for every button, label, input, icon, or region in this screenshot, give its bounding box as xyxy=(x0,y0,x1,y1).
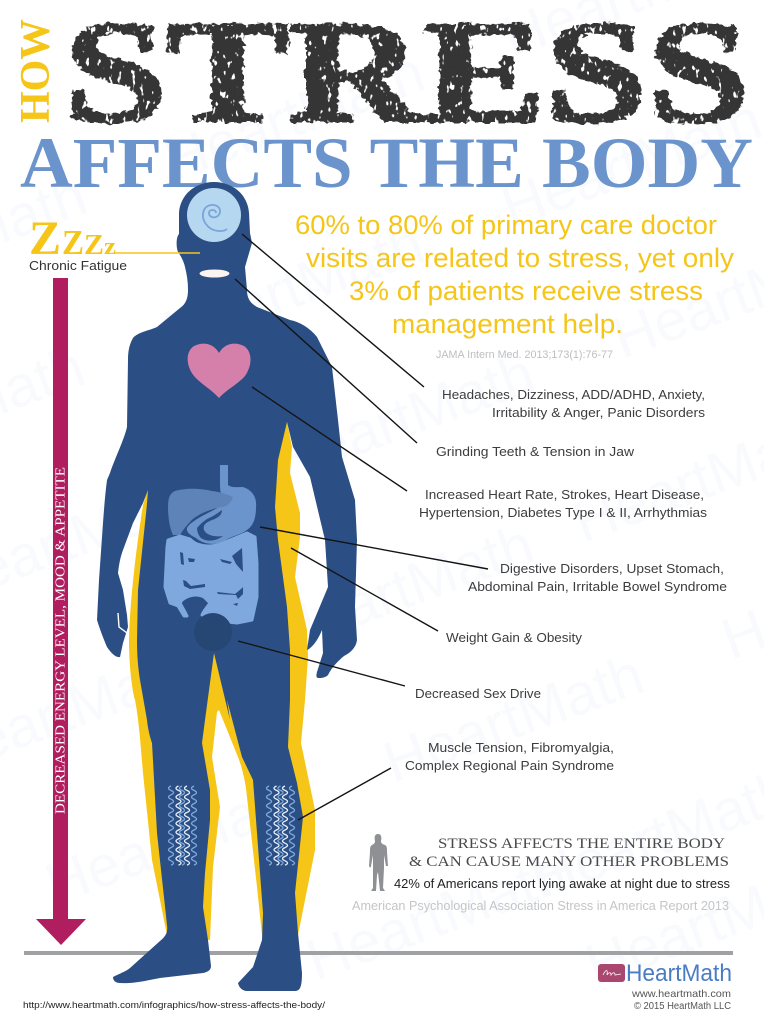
label: head: Headaches, Dizziness, ADD/ADHD, Anxiety, xyxy=(442,387,705,402)
label: muscle: Muscle Tension, Fibromyalgia, xyxy=(428,740,614,755)
icon: small grey figure xyxy=(369,834,388,891)
footer: website and copyright: © 2015 HeartMath LLC xyxy=(634,1001,731,1012)
callout: entire body: American Psychological Association Stress in America Report 2013 xyxy=(352,898,729,913)
stomach xyxy=(187,465,256,544)
title: HOW: HOW xyxy=(13,19,59,123)
fatigue connector line xyxy=(115,252,200,254)
chronic fatigue Zzz: z xyxy=(104,234,116,260)
callout: entire body xyxy=(352,836,730,913)
label: head xyxy=(442,387,706,420)
label: head: Irritability & Anger, Panic Disorders xyxy=(492,405,706,420)
jaw xyxy=(200,270,230,278)
groin circle xyxy=(194,613,232,651)
text: HeartMath xyxy=(265,512,542,665)
label: muscle xyxy=(405,740,614,773)
ground line xyxy=(24,951,733,955)
label: heart: Hypertension, Diabetes Type I & II, Arrhythmias xyxy=(419,505,708,520)
footer: url: http://www.heartmath.com/infographics/how-stress-affects-the-body/ xyxy=(23,1000,325,1011)
footer: website and copyright: www.heartmath.com xyxy=(631,988,731,1000)
callout: entire body: 42% of Americans report lying awake at night due to stress xyxy=(394,876,730,891)
body figure xyxy=(97,182,357,991)
footer: website and copyright xyxy=(631,988,731,1012)
arrow: decreased energy xyxy=(36,278,86,945)
text: HeartMath xyxy=(266,341,543,494)
callout: entire body: & CAN CAUSE MANY OTHER PROBLEMS xyxy=(409,854,729,870)
label: heart xyxy=(419,487,708,520)
statistic headline: management help. xyxy=(392,309,623,339)
logo: HeartMath: HeartMath xyxy=(626,960,732,987)
text: HeartMath xyxy=(155,211,432,364)
blue silhouette xyxy=(97,182,357,991)
connector lines xyxy=(235,234,488,820)
text: HeartMath xyxy=(375,642,652,795)
text: HeartMath xyxy=(37,764,314,917)
label: digestion: Digestive Disorders, Upset Stomach, xyxy=(500,561,724,576)
label: digestion: Abdominal Pain, Irritable Bowel Syndrome xyxy=(468,579,727,594)
intestines xyxy=(165,533,257,623)
statistic headline: 60% to 80% of primary care doctor xyxy=(295,210,717,240)
citation: JAMA: JAMA Intern Med. 2013;173(1):76-77 xyxy=(436,349,613,361)
statistic headline xyxy=(295,210,735,339)
text: HeartMath xyxy=(298,840,575,993)
statistic headline: visits are related to stress, yet only xyxy=(306,243,735,273)
muscle waves right xyxy=(266,786,294,865)
chronic fatigue Zzz xyxy=(29,212,127,273)
title: AFFECTS THE BODY: AFFECTS THE BODY xyxy=(20,123,753,203)
label: heart: Increased Heart Rate, Strokes, Heart Disease, xyxy=(425,487,704,502)
heart xyxy=(188,344,250,398)
label: digestion xyxy=(468,561,727,594)
chronic fatigue Zzz: Z xyxy=(29,212,61,265)
chronic fatigue Zzz: Z xyxy=(84,230,104,261)
statistic headline: 3% of patients receive stress xyxy=(349,276,703,306)
stomach slit xyxy=(197,510,223,541)
label: sex drive: Decreased Sex Drive xyxy=(415,686,541,701)
muscle waves left xyxy=(168,786,196,865)
thumb gap xyxy=(118,613,127,633)
brain spiral xyxy=(187,188,241,242)
text: HeartMath xyxy=(493,87,764,240)
liver xyxy=(168,489,233,535)
label: jaw: Grinding Teeth & Tension in Jaw xyxy=(436,444,635,459)
text: HeartMath xyxy=(156,40,433,193)
callout: entire body: STRESS AFFECTS THE ENTIRE BODY xyxy=(438,836,725,852)
label: muscle: Complex Regional Pain Syndrome xyxy=(405,758,614,773)
label: weight: Weight Gain & Obesity xyxy=(446,630,583,645)
yellow stress outline xyxy=(129,422,315,940)
chronic fatigue Zzz: Chronic Fatigue xyxy=(29,258,127,273)
arrow: decreased energy: DECREASED ENERGY LEVEL, MOOD & APPETITE xyxy=(52,467,68,814)
chronic fatigue Zzz: Z xyxy=(62,223,84,262)
